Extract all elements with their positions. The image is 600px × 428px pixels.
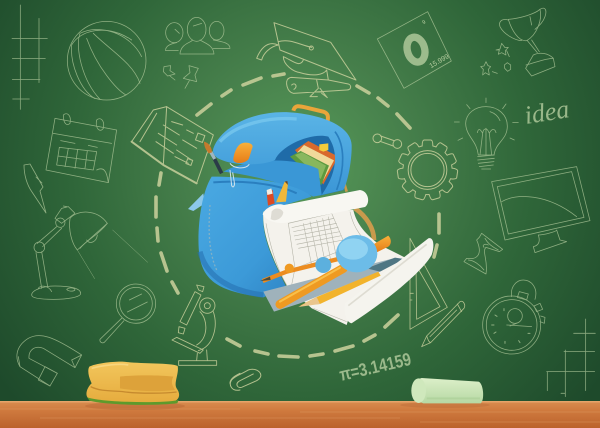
icon: paperclip chalk (230, 369, 261, 390)
text: idea: idea (522, 94, 571, 130)
orange zipper pull (233, 143, 253, 163)
tan strap (355, 208, 374, 240)
side strap (188, 193, 205, 211)
wooden ledge (0, 401, 600, 428)
icon: set square triangle (410, 238, 447, 329)
paper top curl (263, 190, 368, 223)
backpack flap (213, 112, 352, 195)
yellow pencil (276, 182, 288, 202)
icon: wrench (373, 134, 402, 148)
text: pi value: π=3.14159 (337, 349, 413, 385)
backpack interior (267, 125, 350, 196)
icon: pencil (422, 301, 465, 347)
icon: oxygen periodic tile: 9 (421, 19, 427, 26)
dashed chalk circle (156, 74, 439, 357)
icon: pen (24, 164, 46, 213)
icon: calendar (46, 114, 117, 183)
icon: trophy (500, 8, 555, 76)
icon: hourglass (464, 233, 503, 274)
compass body (260, 235, 391, 304)
backpack body (198, 177, 312, 297)
icon: people group (166, 17, 230, 54)
backpack handle (293, 106, 328, 121)
paper fold and right curl (344, 238, 433, 323)
icon: open book (132, 107, 213, 183)
icon: magnifying glass (100, 284, 156, 343)
blueprint lines (266, 212, 377, 322)
backpack with drawing supplies (188, 106, 433, 325)
eraser sponge (86, 362, 179, 405)
icon: oxygen periodic tile: 15.999 (428, 53, 451, 70)
icon: microscope (172, 285, 217, 365)
icon: grid sketch bottom right (547, 319, 595, 397)
icon: computer monitor (492, 167, 590, 253)
icon: basketball (67, 21, 146, 100)
icon: desk lamp (32, 206, 148, 299)
drawing paper sheet (263, 210, 407, 325)
red marker (267, 190, 275, 206)
icon: light bulb (454, 98, 518, 169)
front upper pocket (223, 160, 322, 197)
icon: graduation cap and diploma (257, 23, 356, 98)
icon: gear (397, 140, 458, 201)
icon: stars (481, 43, 511, 75)
icon: stopwatch (483, 280, 545, 354)
paperclip (230, 170, 234, 187)
yellow pencil on paper (300, 272, 381, 306)
icon: push pins (163, 66, 198, 88)
icon: oxygen periodic tile (377, 12, 451, 88)
icon: grid sketch top left (12, 5, 47, 109)
books (290, 141, 338, 185)
blue ruler (263, 258, 404, 312)
chalk stick (411, 378, 483, 403)
paintbrush (204, 142, 222, 173)
icon: horseshoe magnet (17, 335, 82, 386)
